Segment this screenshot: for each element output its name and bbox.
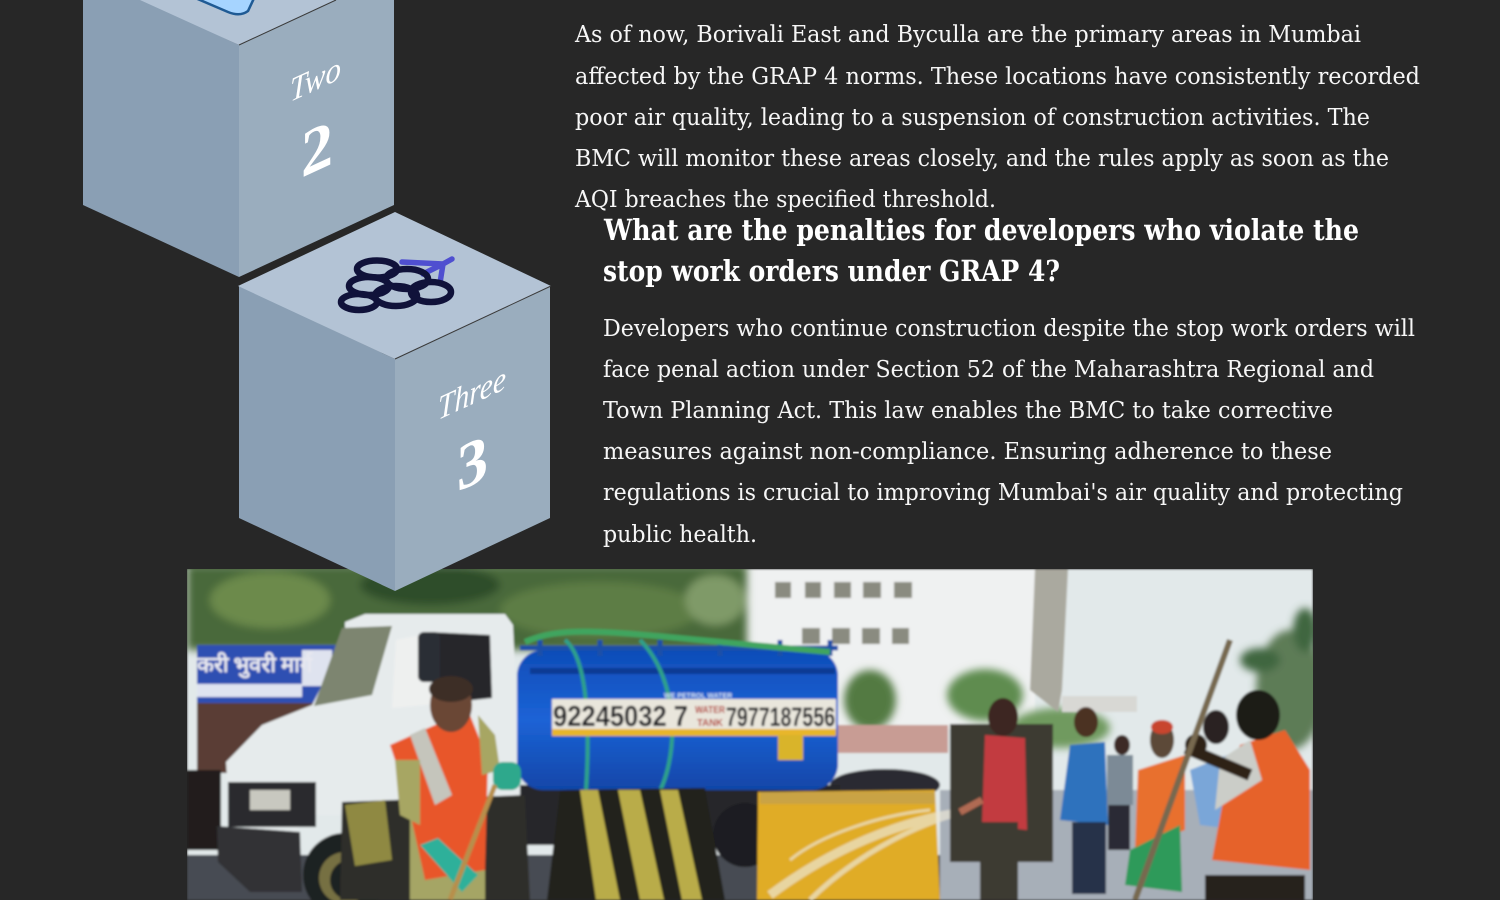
green hose side right [640,640,672,800]
label: Three: Three [438,358,506,428]
worker in vest foreground [390,676,521,900]
small tank caption: WE PETROL WATER [664,693,732,700]
second phone number: 7977187556 [726,702,835,732]
left face [83,0,239,277]
tank railing [520,640,838,656]
text block: penalties answer [603,316,1415,548]
road [187,853,942,900]
top face [140,0,335,45]
text block: affected areas [574,22,1420,213]
text block: penalties answer: measures against non-compliance. Ensuring adherence to these [603,439,1332,465]
yellow barricade top highlight [760,792,935,804]
icon: grapes [341,259,452,310]
tanker chassis [520,785,840,845]
front wheel [302,832,344,900]
building windows [775,582,912,644]
water tank label: WATER [695,705,726,716]
text block: affected areas: AQI breaches the specified threshold. [574,187,996,213]
rear wheel area [713,804,760,868]
text block: penalties answer: regulations is crucial to improving Mumbai's air quality and protecting [603,480,1403,506]
worker woman in orange and green [1125,720,1185,892]
tree canopy [187,565,1324,750]
worker grey shirt [1107,735,1133,850]
dark board [950,724,1053,862]
text block: penalties answer: face penal action under Section 52 of the Maharashtra Regional and [603,357,1374,383]
label: Two: Two [290,48,341,110]
left motorbike [187,770,221,850]
text block: penalties answer: Town Planning Act. This law enables the BMC to take corrective [603,398,1333,424]
truck cab [217,614,521,900]
brick wall [196,701,314,774]
tank upper band [530,668,835,674]
text block: affected areas: As of now, Borivali East and Byculla are the primary areas in Mumbai [574,22,1361,48]
text block: affected areas: affected by the GRAP 4 norms. These locations have consistently recorded [575,64,1420,90]
green hose on top [525,632,830,652]
cube three [238,212,551,591]
worker blue shirt [1060,707,1108,894]
broom handle [1135,640,1230,900]
barricade centre [547,788,725,900]
wet road right [940,790,1313,900]
edge highlight [395,286,551,359]
water spray [770,810,965,900]
yellow hazard plate [778,735,803,760]
text block: affected areas: poor air quality, leading to a suspension of construction activities. The [575,105,1370,131]
edge highlight [239,0,336,45]
right face [239,0,394,277]
green hose side left [565,640,588,805]
right face [395,286,550,591]
yellow barricade [757,790,940,900]
text block: penalties answer: Developers who continue construction despite the stop work orders will [603,316,1415,342]
heading: penalties question: What are the penalties for developers who violate the [603,213,1359,247]
worker blue uniform behind [1190,710,1240,830]
heading: penalties question [603,213,1359,288]
grape stem [402,259,452,283]
left face [239,286,395,591]
phone number band [552,699,836,729]
phone number text: 92245032 7 [553,701,688,733]
low building right [1062,696,1137,712]
tower [1030,569,1068,712]
grape cluster [341,260,451,310]
blue signboard [197,645,337,703]
barricade left [340,795,530,900]
yellow stripe [552,729,836,736]
mirror [418,632,440,682]
worker red shirt [960,698,1027,900]
door window [428,684,429,685]
heading: penalties question: stop work orders under GRAP 4? [603,254,1060,288]
text block: affected areas: BMC will monitor these areas closely, and the rules apply as soon as the [575,146,1389,172]
lower pink building [838,725,948,753]
dark car behind truck [828,768,942,793]
photo: water tanker and workers cleaning the road [187,565,1324,900]
cube two [83,0,394,277]
number 2: 2 [301,105,333,193]
icon: water tray [186,0,256,14]
sky and building backdrop [187,569,1313,857]
signboard panel [302,650,332,686]
bumper [217,826,302,892]
worker orange vest right [1185,690,1310,900]
barricade centre stripes [580,790,702,900]
signboard white strip [197,684,302,697]
water tank label 2: TANK [697,718,724,729]
barricade left yellow [345,800,392,866]
headlight block [228,782,316,827]
signboard hindi text: करी भुवरी मार्ग [196,647,314,679]
tanker body [517,650,838,790]
white building [735,569,1035,729]
top face [238,212,551,359]
windscreen [314,626,392,706]
text block: penalties answer: public health. [603,522,757,548]
number 3: 3 [457,420,488,507]
